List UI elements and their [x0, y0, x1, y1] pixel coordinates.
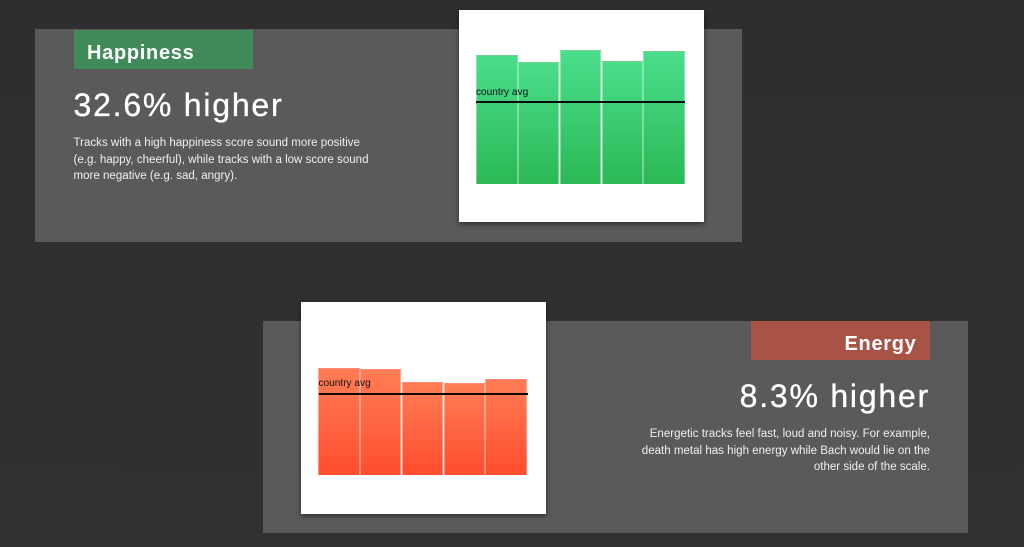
text block: happiness description — [74, 137, 369, 182]
text block: happiness description: more negative (e.g. sad, angry). — [74, 170, 237, 182]
panel: energy — [263, 321, 968, 533]
text block: energy description — [642, 428, 930, 473]
statistic: 8.3% higher: 8.3% higher — [740, 378, 930, 414]
chart card: happiness bars — [458, 10, 704, 222]
label: country avg: country avg — [318, 378, 371, 389]
bar 1 — [318, 368, 360, 475]
average line — [318, 393, 528, 395]
bar 3 — [402, 382, 443, 475]
bar 4 — [602, 60, 643, 184]
bar 4 — [444, 382, 485, 475]
text block: energy description: Energetic tracks feel fast, loud and noisy. For example, — [650, 428, 930, 440]
text block: energy description: death metal has high energy while Bach would lie on the — [642, 444, 930, 456]
bar 5 — [643, 50, 685, 184]
text block: happiness description: Tracks with a high happiness score sound more positive — [74, 137, 360, 149]
heading tag: Energy: Energy — [844, 333, 916, 355]
statistic: 32.6% higher: 32.6% higher — [74, 87, 283, 123]
heading tag: Energy — [750, 321, 930, 360]
bar 2 — [360, 368, 401, 475]
label: country avg: country avg — [476, 86, 528, 98]
bar 1 — [476, 55, 518, 184]
average line — [476, 101, 685, 103]
text block: energy description: other side of the scale. — [814, 461, 930, 473]
panel: happiness — [35, 29, 742, 242]
bar 5 — [485, 379, 527, 475]
bar 3 — [560, 50, 601, 184]
heading tag: Happiness: Happiness — [87, 42, 194, 64]
heading tag: Happiness — [74, 30, 253, 69]
chart card: energy bars — [300, 302, 546, 514]
text block: happiness description: (e.g. happy, cheerful), while tracks with a low score sound — [74, 154, 369, 166]
bar 2 — [518, 62, 559, 184]
